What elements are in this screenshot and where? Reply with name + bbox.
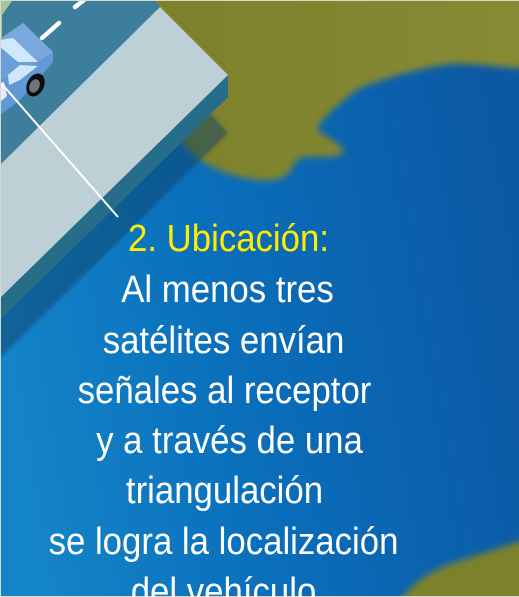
car body bbox=[0, 23, 53, 115]
road asphalt bbox=[0, 0, 160, 165]
body line 2: satélites envían bbox=[103, 320, 344, 362]
leader line bbox=[1, 83, 118, 217]
body line 4: y a través de una bbox=[96, 420, 363, 462]
body line 5: triangulación bbox=[126, 470, 323, 512]
grass corner bbox=[0, 1, 12, 40]
road pale strip bbox=[0, 7, 228, 298]
body line 1: Al menos tres bbox=[121, 269, 334, 311]
land: lower right coast bbox=[395, 538, 519, 597]
wheel bbox=[23, 71, 48, 99]
lane dashes bbox=[42, 0, 84, 38]
car roof bbox=[0, 23, 53, 62]
road shadow bbox=[0, 113, 228, 358]
side window bbox=[8, 65, 38, 85]
heading: 2. Ubicación: 2. Ubicación: bbox=[128, 218, 329, 260]
body line 6: se logra la localización bbox=[49, 521, 398, 563]
body line 3: señales al receptor bbox=[78, 370, 371, 412]
road side face bbox=[0, 75, 228, 320]
car side shade bbox=[0, 52, 53, 115]
car bbox=[0, 23, 53, 115]
windshield bbox=[0, 38, 38, 62]
land: upper coast bbox=[100, 0, 519, 180]
rear window bbox=[0, 82, 7, 102]
road platform bbox=[0, 0, 228, 320]
